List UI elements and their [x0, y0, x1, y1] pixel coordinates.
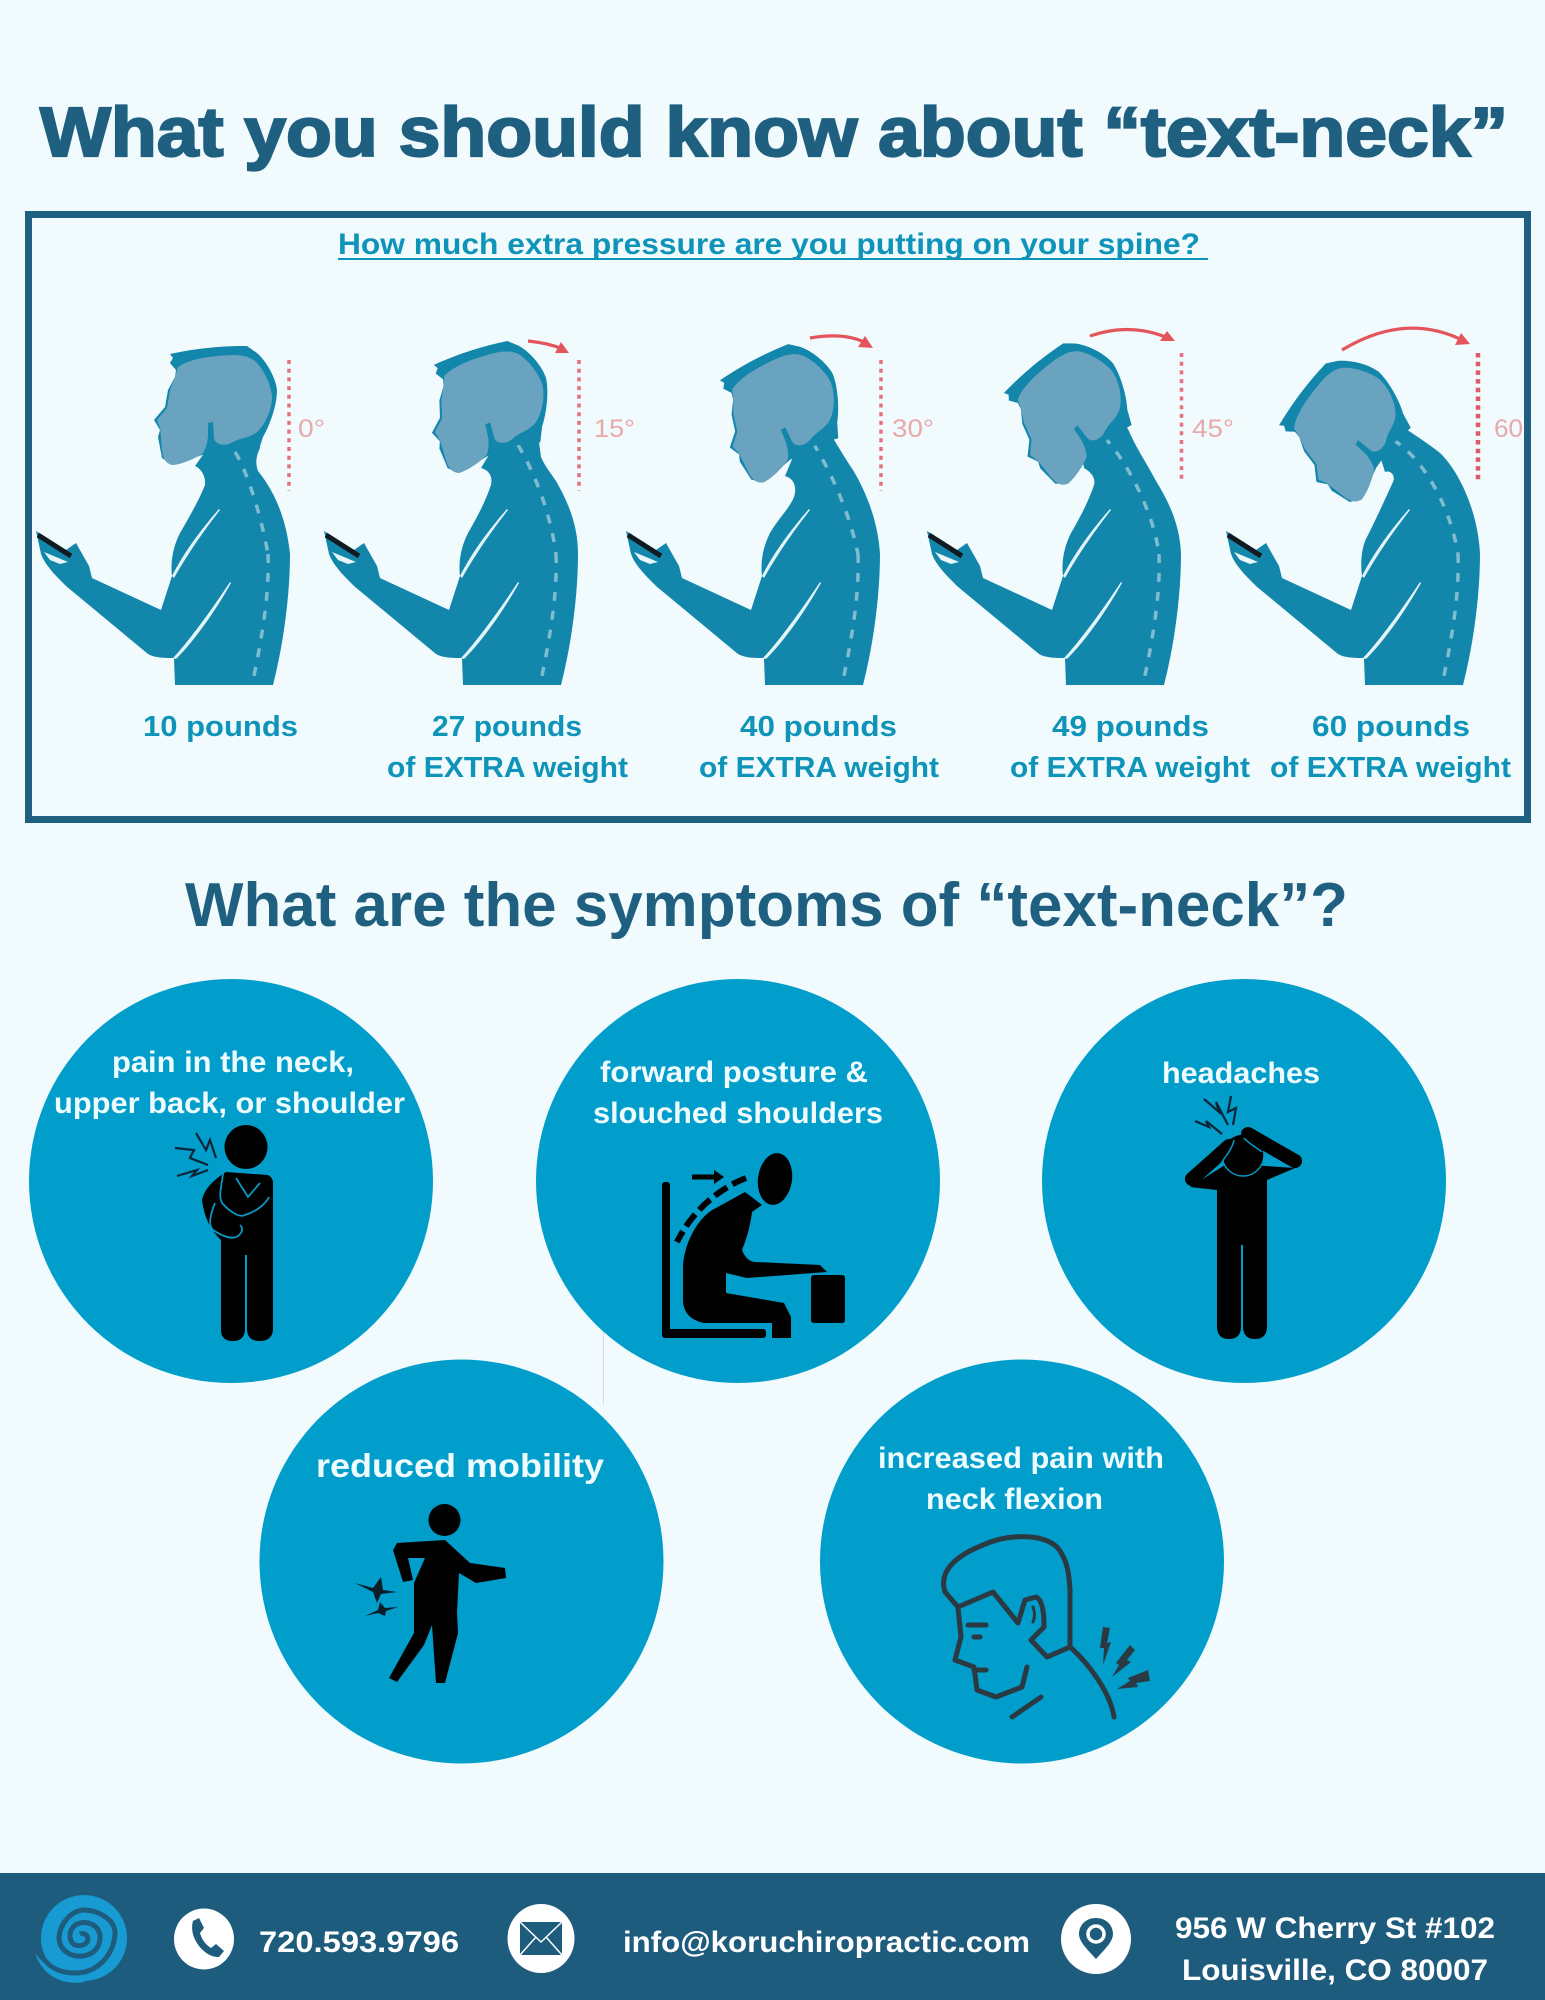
footer bar	[0, 1873, 1545, 2000]
symptom: reduced mobility: reduced mobility	[316, 1447, 605, 1484]
label: 10 pounds: 10 pounds	[143, 711, 298, 743]
label: 40 pounds	[699, 711, 939, 784]
symptom: headaches	[1042, 979, 1446, 1383]
symptom: increased pain with neck flexion: increased pain with	[878, 1442, 1164, 1475]
symptom: reduced mobility	[260, 1360, 664, 1764]
figure: 60 degrees head tilt	[1226, 342, 1480, 685]
symptom: forward posture	[536, 979, 940, 1383]
symptom: forward posture: forward posture &	[600, 1056, 868, 1089]
angle guides and labels: 45°	[1192, 415, 1234, 443]
address: 956 W Cherry St #102	[1175, 1912, 1495, 1945]
icon: person holding head	[1190, 1096, 1295, 1339]
label: 49 pounds	[1010, 711, 1250, 784]
label: 49 pounds: of EXTRA weight	[1010, 752, 1250, 784]
symptom: pain in the neck	[29, 979, 433, 1383]
angle guides and labels: 60	[1494, 415, 1523, 443]
address: Louisville, CO 80007	[1182, 1954, 1488, 1987]
angle guides and labels	[289, 353, 1523, 491]
label: 60 pounds: of EXTRA weight	[1270, 752, 1511, 784]
symptom: forward posture: slouched shoulders	[593, 1097, 883, 1130]
figure: 30 degrees head tilt	[626, 333, 880, 685]
label: 60 pounds: 60 pounds	[1312, 711, 1470, 743]
panel: extra pressure on the spine	[28, 214, 1528, 820]
label: 27 pounds: of EXTRA weight	[387, 752, 628, 784]
figure: 0 degrees head tilt	[36, 346, 290, 685]
symptom: increased pain with neck flexion	[820, 1360, 1224, 1764]
label: 27 pounds	[387, 711, 628, 784]
symptom: pain in the neck: pain in the neck,	[112, 1046, 354, 1079]
logo: koru spiral	[35, 1895, 127, 1983]
icon: head outline with neck pain	[944, 1537, 1150, 1717]
label: 40 pounds: of EXTRA weight	[699, 752, 939, 784]
icon: limping person	[355, 1504, 506, 1683]
symptom: increased pain with neck flexion: neck flexion	[926, 1483, 1103, 1516]
angle guides and labels: 30°	[892, 415, 934, 443]
panel heading: How much extra pressure are you putting on your spine?	[338, 228, 1200, 261]
icon: slouched seated person	[662, 1151, 845, 1338]
icon: location pin	[1061, 1904, 1131, 1974]
rotation arrows	[528, 328, 1470, 353]
symptom: headaches: headaches	[1162, 1057, 1320, 1090]
icon: person holding shoulder	[175, 1125, 273, 1341]
icon: phone	[174, 1908, 234, 1970]
email address: info@koruchiropractic.com	[623, 1926, 1030, 1959]
address	[1175, 1912, 1495, 1987]
symptoms heading: What are the symptoms of “text-neck”?	[185, 871, 1348, 940]
label: 60 pounds	[1270, 711, 1511, 784]
icon: email	[508, 1904, 574, 1973]
label: 49 pounds: 49 pounds	[1052, 711, 1209, 743]
figure: 15 degrees head tilt	[324, 335, 578, 685]
angle guides and labels: 15°	[594, 415, 635, 443]
label: 27 pounds: 27 pounds	[432, 711, 582, 743]
angle guides and labels: 0°	[298, 415, 325, 443]
phone number: 720.593.9796	[259, 1926, 459, 1959]
label: 40 pounds: 40 pounds	[740, 711, 897, 743]
title: What you should know about “text-neck”	[40, 93, 1508, 171]
figure: 45 degrees head tilt	[927, 327, 1181, 685]
symptom: pain in the neck: upper back, or shoulder	[54, 1087, 405, 1120]
